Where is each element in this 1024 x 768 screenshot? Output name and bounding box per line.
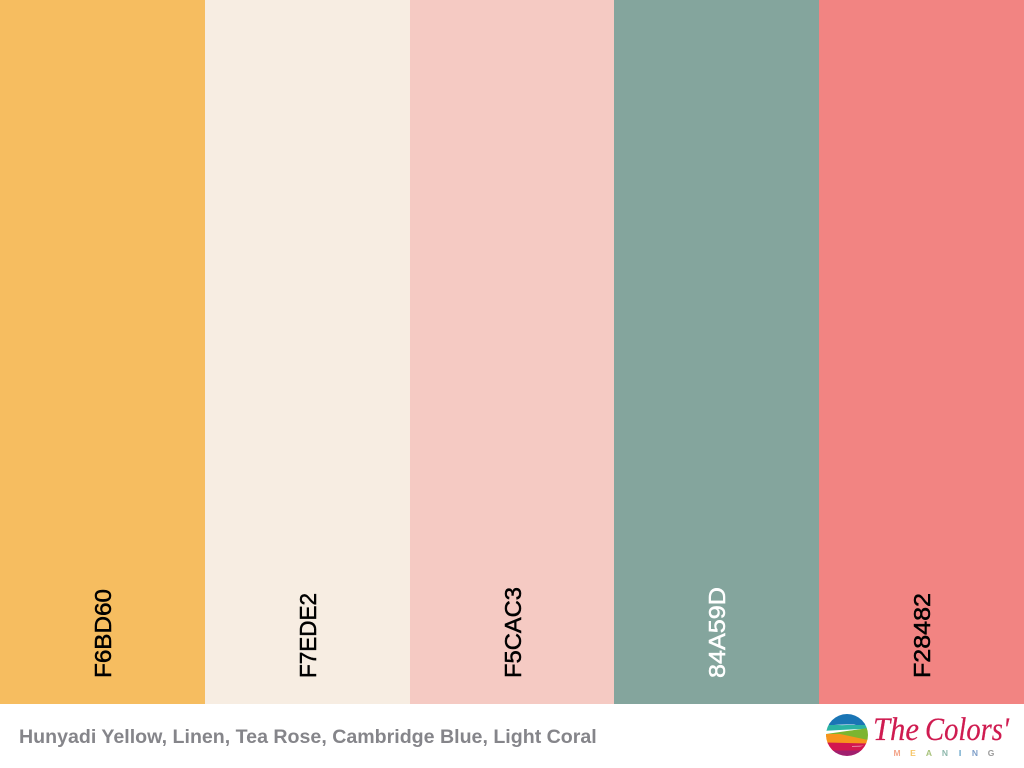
palette names caption: Hunyadi Yellow, Linen, Tea Rose, Cambridge Blue, Light Coral [19,726,597,748]
logo wordmark [873,712,1010,748]
swatch: Tea Rose [410,0,614,704]
swatch: Light Coral [819,0,1024,704]
logo tagline: N [972,748,978,758]
swatch: Linen [205,0,410,704]
logo: The Colors' Meaning [826,712,1010,758]
hex label: F28482: F28482 [909,593,935,678]
logo tagline: I [959,748,961,758]
hex label: F5CAC3: F5CAC3 [500,587,526,678]
icon: striped colour globe [826,714,868,757]
hex label: F7EDE2: F7EDE2 [295,593,321,678]
logo tagline: E [910,748,916,758]
hex label: 84A59D: 84A59D [704,587,730,678]
logo wordmark: The [873,712,919,748]
hex label: F6BD60: F6BD60 [90,589,116,678]
logo tagline: M [893,748,901,758]
swatch: Hunyadi Yellow [0,0,205,704]
logo tagline: A [926,748,932,758]
logo tagline: N [942,748,948,758]
logo tagline [893,748,995,758]
logo wordmark: Colors' [925,712,1010,748]
swatch: Cambridge Blue [614,0,819,704]
logo tagline: G [988,748,995,758]
